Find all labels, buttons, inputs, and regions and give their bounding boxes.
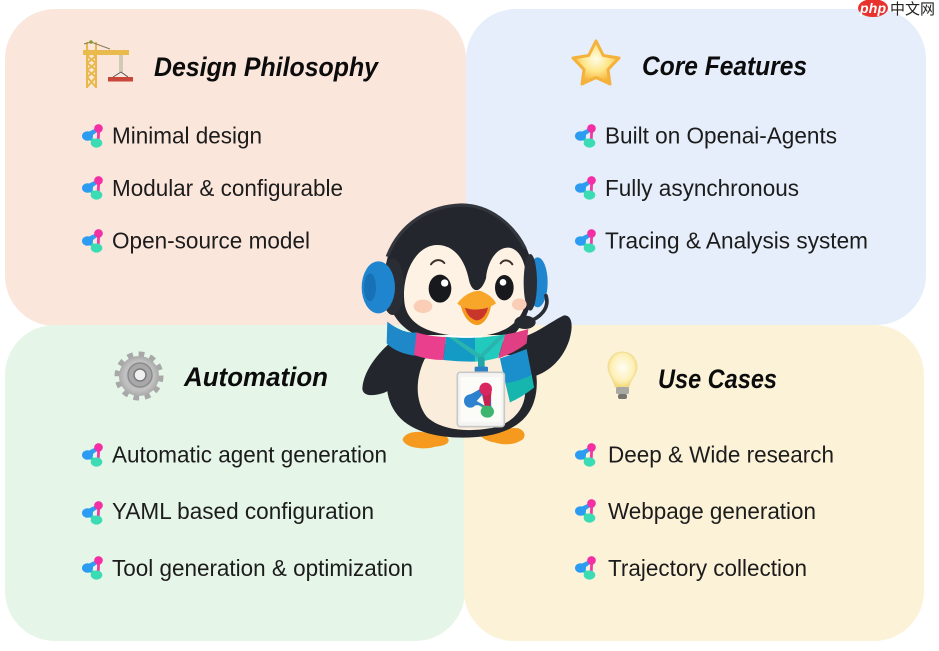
icon: bullet	[575, 499, 596, 523]
text: yaml based configuration: YAML based configuration	[112, 498, 374, 524]
eyebrows	[431, 260, 444, 264]
heading: use cases: Use Cases	[658, 364, 777, 394]
icon: bullet	[82, 501, 103, 525]
watermark: php logo: php	[859, 0, 886, 16]
icon: gear	[118, 354, 160, 398]
panel: design philosophy	[5, 9, 466, 326]
icon: bullet	[82, 556, 103, 580]
text: webpage generation: Webpage generation	[608, 498, 816, 524]
text: trajectory collection: Trajectory collection	[608, 555, 807, 581]
beak	[457, 291, 496, 309]
watermark: php logo	[858, 0, 935, 18]
feet	[403, 432, 449, 448]
icon: bullet	[82, 229, 103, 253]
icon: light bulb	[608, 352, 637, 399]
right ear cup	[528, 257, 548, 307]
text: minimal design: Minimal design	[112, 122, 262, 148]
eyes	[429, 275, 451, 303]
illustration: penguin mascot	[362, 205, 572, 448]
heading: design philosophy: Design Philosophy	[154, 52, 380, 82]
mouth	[461, 303, 491, 325]
heading: core features: Core Features	[642, 51, 807, 81]
heading: automation: Automation	[183, 362, 328, 392]
icon: bullet	[82, 176, 103, 200]
flippers	[362, 344, 413, 395]
list: automation items	[82, 442, 413, 581]
icon: bullet	[575, 176, 596, 200]
lanyard	[449, 335, 506, 360]
icon: bullet	[82, 443, 103, 467]
text: modular and configurable: Modular & configurable	[112, 175, 343, 201]
microphone	[527, 296, 547, 322]
badge	[457, 372, 504, 427]
scarf	[387, 322, 534, 402]
icon: bullet	[575, 124, 596, 148]
text: fully asynchronous: Fully asynchronous	[605, 175, 799, 201]
headband	[387, 205, 525, 257]
list: use cases items	[575, 442, 834, 581]
list: design philosophy items	[82, 122, 343, 254]
watermark: php logo: 中文网	[890, 1, 935, 18]
panel: use cases	[464, 325, 924, 641]
text: open-source model: Open-source model	[112, 228, 310, 254]
list: core features items	[575, 122, 868, 254]
icon: bullet	[82, 124, 103, 148]
head	[385, 206, 534, 335]
text: built on openai-agents: Built on Openai-Agents	[605, 122, 837, 148]
panel: automation	[5, 325, 465, 641]
badge logo	[464, 383, 494, 418]
icon: bullet	[575, 229, 596, 253]
face	[404, 245, 527, 336]
text: automatic agent generation: Automatic agent generation	[112, 442, 387, 468]
text: deep and wide research: Deep & Wide research	[608, 442, 834, 468]
belly	[418, 355, 525, 430]
icon: crane	[83, 40, 133, 88]
left ear cup	[381, 258, 404, 315]
cheeks	[414, 300, 432, 313]
icon: star	[573, 41, 619, 84]
icon: bullet	[575, 443, 596, 467]
text: tracing and analysis system: Tracing & Analysis system	[605, 228, 868, 254]
icon: bullet	[575, 556, 596, 580]
body	[387, 342, 537, 438]
panel: core features	[466, 9, 926, 325]
text: tool generation and optimization: Tool generation & optimization	[112, 555, 413, 581]
